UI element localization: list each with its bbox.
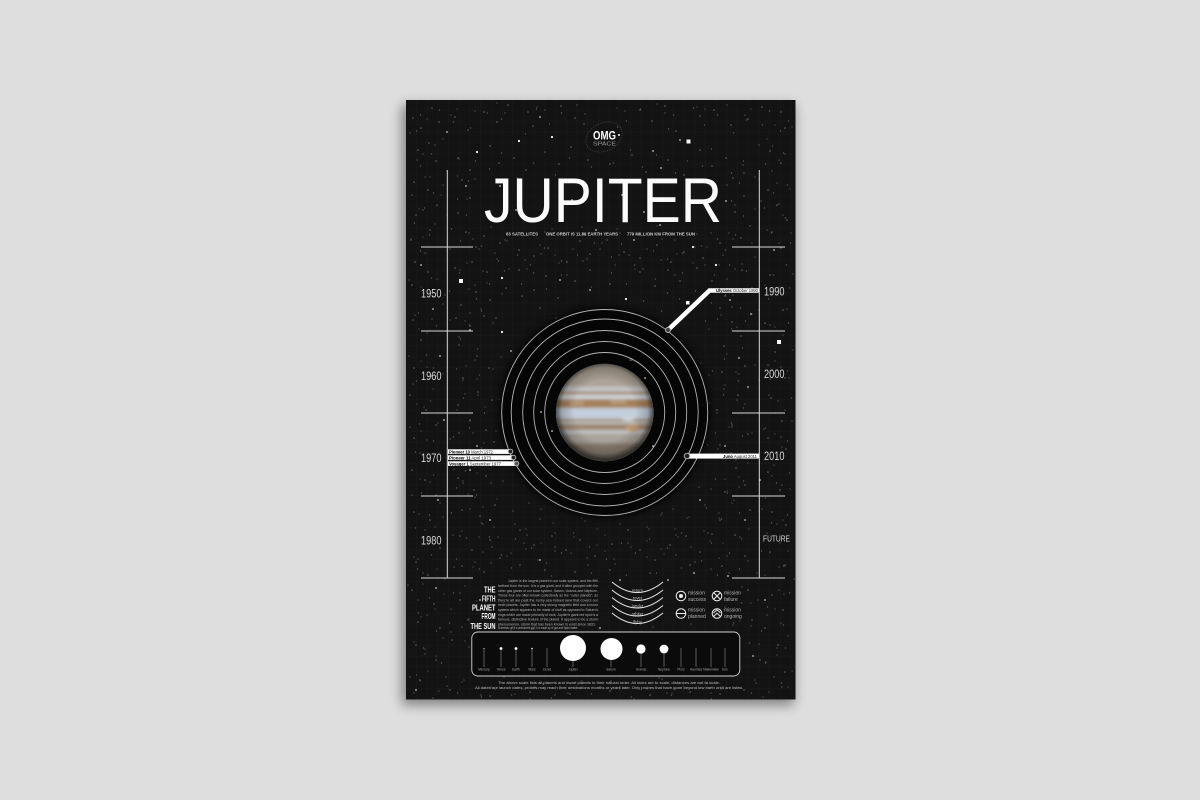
legend icon: mission planned: planned [688,614,706,620]
planet scale panel: Eris [722,668,728,672]
description text: famous, distinctive feature of the planet. It appears to be a storm [498,618,598,622]
planet scale panel: Saturn [606,668,616,672]
decade labels: 1950 [421,286,442,300]
logo: OMG Space: SPACE [593,141,616,147]
decade labels: 1970 [421,451,442,465]
decade labels [421,284,790,548]
heading: the fifth planet from the sun: THE [484,586,496,594]
mission: Juno [684,453,759,459]
decade labels: 2000 [764,367,785,381]
description text: Scientists call it a permanent gulf; it is made up of gas and liquid matter. [498,626,578,630]
legend: mission types: flyby [633,620,643,624]
facts line: ONE ORBIT IS 11.86 EARTH YEARS [546,232,618,236]
legend icon: mission failure: mission [724,590,741,596]
timeline: right [732,170,785,578]
mission: Juno: Juno August 2011 [723,454,758,459]
description text: phenomenon, storm that has been known to exist since 1831. [498,622,596,626]
legend icon: mission ongoing [712,608,742,620]
legend: mission types: return [632,588,644,593]
legend icon: mission failure: failure [724,597,738,603]
planet scale panel: Makemake [703,668,719,672]
legend icon: mission ongoing: ongoing [724,614,742,620]
description text: These four are often known collectively as the "outer planets", as [498,594,598,598]
planets to scale [484,635,668,661]
facts line: 63 SATELLITES [506,232,538,236]
planet scale panel: Jupiter [568,668,579,672]
planet scale panel: Haumea [690,668,702,672]
bright square stars [459,140,781,361]
planet scale panel: Uranus [636,668,647,672]
orbit rings [502,310,708,516]
decade labels: FUTURE [763,534,790,544]
legend icon: mission success [676,590,707,603]
footnote [475,680,743,690]
mission: Ulysses: Ulysses October 1990 [716,288,759,293]
planet scale panel: Mars [528,668,536,672]
heading: the fifth planet from the sun: FIFTH [482,594,496,604]
decade labels: 1990 [764,284,785,298]
legend: mission types: orbiter [632,612,644,616]
legend icon: mission success: success [688,597,707,603]
decade labels: 2010 [764,449,785,463]
description text [498,579,599,630]
legend: mission types: lander [632,604,644,608]
facts line [506,232,696,236]
planet scale panel: Venus [497,668,506,672]
decade labels: 1980 [421,534,442,548]
decade labels: 1960 [421,369,442,383]
heading: the fifth planet from the sun [470,586,496,631]
legend icon: mission failure [712,590,741,603]
planet scale panel [472,632,740,676]
planet scale panel: Ceres [543,668,552,672]
legend icon: mission ongoing: mission [724,608,741,614]
mission: Pioneer 11 [448,455,516,460]
description text: other gas giants of our solar system, Saturn, Uranus and Neptune. [498,589,598,593]
legend icon: mission success: mission [688,590,705,596]
mission: Pioneer 11: Pioneer 11 April 1973 [449,455,492,460]
planet scale panel: Neptune [658,668,670,672]
facts line: 779 MILLION KM FROM THE SUN [627,232,696,236]
poster panel [406,100,796,700]
mission: Pioneer 10 [448,449,513,454]
logo: OMG Space: OMG [593,128,616,142]
legend icon: mission planned [676,608,706,620]
legend icon: mission planned: mission [688,608,705,614]
planet scale panel: Mercury [478,668,490,672]
logo: OMG Space [581,116,627,158]
planet scale panel: Pluto [677,668,685,672]
description text: rings which are made primarily of rock. Jupiter's giant red spot is a [498,613,599,617]
planet scale panel: Earth [512,668,520,672]
heading: the fifth planet from the sun: FROM [482,612,496,621]
planet: Jupiter [541,363,655,464]
heading: the fifth planet from the sun: THE SUN [470,622,496,631]
description text: Jupiter is the largest planet in our solar system, and the fifth [508,579,598,583]
mission: Voyager 1: Voyager 1 September 1977 [449,461,502,466]
footnote: The above scale lists all planets and dwarf planets in their natural order. All sizes are to scale, distances are not to scale. [498,680,720,685]
description text: farthest from the sun. It is a gas giant, and it often grouped with the [498,584,598,588]
legend: mission types [612,582,663,624]
title: JUPITER [484,166,722,236]
footnote: All dates are launch dates, probes may reach their destinations months or years later. Only probes that have gone beyond low earth orbit are listed. [475,685,743,690]
description text: system which appears to be made of stuff as opposed to Saturn's [498,608,598,612]
poster shadow [402,105,794,705]
mission: Pioneer 10: Pioneer 10 March 1972 [449,449,494,454]
heading: the fifth planet from the sun: PLANET [472,604,496,612]
orbit halo [499,306,711,518]
legend: mission types: rover [633,596,643,600]
description text: they're all are past the rocky asa indeed lane that covers our [498,598,599,602]
timeline: left [421,170,473,578]
mission: Ulysses [665,288,759,333]
description text: inner planets. Jupiter has a very strong magnetic field and a moon [498,603,598,607]
